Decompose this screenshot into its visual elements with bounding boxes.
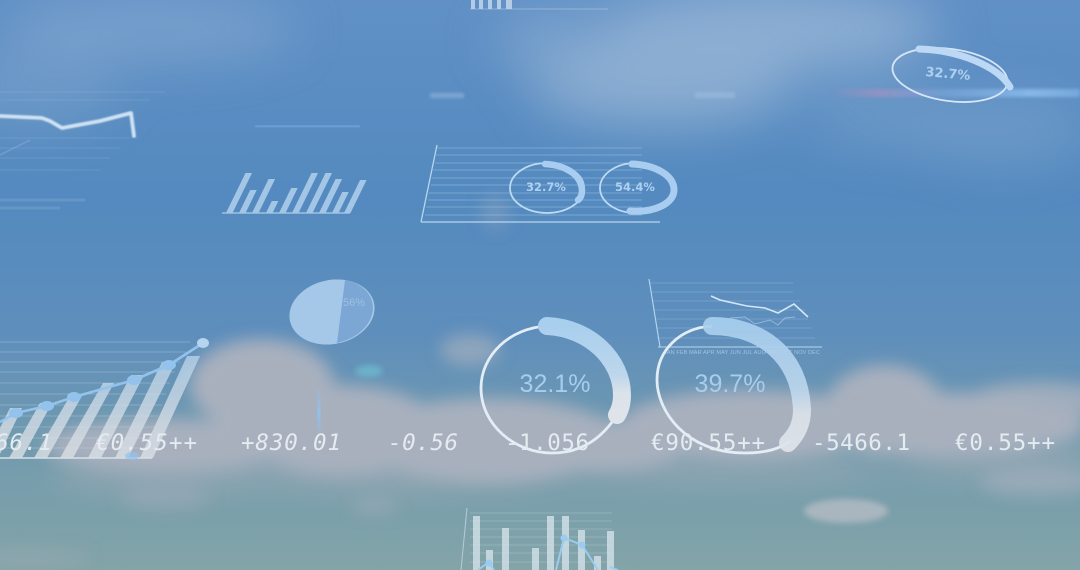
donut: 39.7%: 39.7% [695, 370, 765, 398]
donut: 39.7% [657, 326, 802, 453]
donut: 32.7% [510, 163, 584, 213]
panel: grid chart with two donuts [421, 145, 674, 222]
bar and line chart: bottom center [461, 508, 618, 570]
ticker row of values [0, 430, 1055, 456]
month axis labels: JAN FEB MAR APR MAY JUN JUL AUG SEP OCT NOV DEC [664, 350, 820, 356]
secondary trend line [730, 317, 795, 325]
lens flares [255, 89, 1080, 433]
donut: 32.1% [481, 326, 622, 453]
top edge bar chart fragment [470, 0, 608, 9]
pie chart: 56%: 56% [343, 297, 365, 309]
trend line segments [478, 538, 618, 570]
main trend line [711, 296, 808, 317]
donut: 54.4%: 54.4% [615, 180, 655, 194]
ticker row of values: €0.55++ [955, 430, 1055, 456]
panel: monthly line chart [649, 279, 822, 356]
trend line with markers [0, 338, 209, 460]
donut: 32.1%: 32.1% [520, 370, 590, 398]
ticker row of values: -5466.1 [812, 430, 910, 456]
donut: 54.4% [600, 163, 674, 213]
faint chart: top left with line [0, 92, 165, 208]
ticker row of values: -1.056 [505, 430, 589, 456]
donut: top right 32.7% [889, 41, 1011, 109]
donut: 32.7%: 32.7% [526, 180, 566, 194]
bar chart: small upper left [222, 173, 370, 213]
ticker row of values: +830.01 [241, 430, 341, 456]
ticker row of values: €0.55++ [95, 430, 197, 456]
pie chart: 56% [283, 272, 381, 352]
ticker row of values: -0.56 [388, 430, 458, 456]
ticker row of values: €90.55++ [651, 430, 765, 456]
donut: top right 32.7%: 32.7% [925, 65, 971, 84]
bar and line chart: large lower left [0, 338, 209, 460]
